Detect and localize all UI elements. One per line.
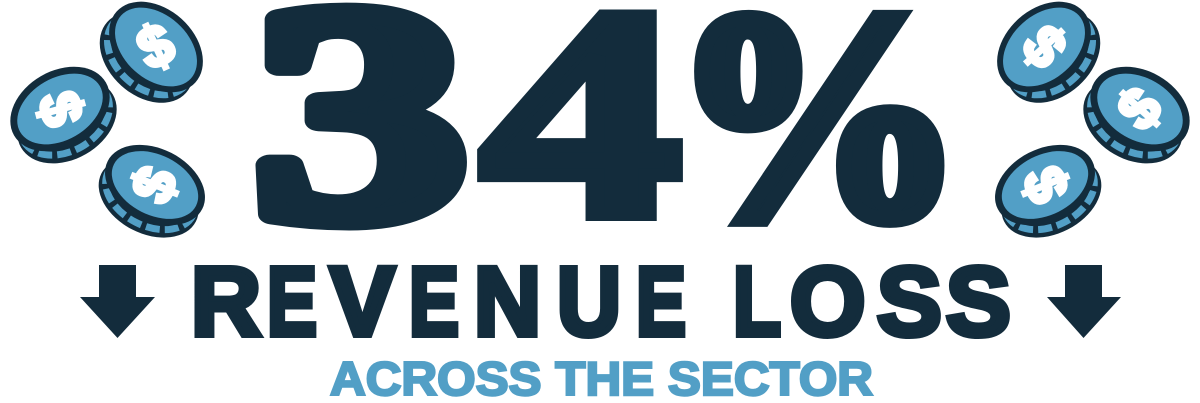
icon: right down arrow [1047, 265, 1121, 338]
icon: coin bottom left: $ [118, 158, 191, 212]
heading: revenue loss: E [409, 247, 459, 356]
heading: revenue loss: E [267, 247, 317, 356]
icon: coin bottom right [981, 129, 1115, 254]
icon: coin middle left: $ [25, 85, 96, 133]
icon: coin top left [82, 0, 221, 121]
icon: coin middle left [0, 50, 132, 181]
icon: coin top right [979, 0, 1118, 121]
icon: left down arrow [80, 265, 155, 338]
icon: coin middle right: $ [1105, 75, 1175, 142]
icon: coin top right: $ [1009, 13, 1079, 80]
heading: revenue loss: V [330, 247, 395, 356]
heading: revenue loss: E [636, 247, 686, 356]
heading: revenue loss: O [790, 247, 865, 356]
icon: coin middle right [1068, 50, 1200, 181]
icon: coin bottom right: $ [1009, 158, 1082, 212]
heading: revenue loss: S [946, 247, 1011, 356]
heading: revenue loss: L [733, 247, 781, 356]
heading: revenue loss: S [877, 247, 942, 356]
heading: revenue loss: R [191, 247, 261, 356]
icon: coin bottom left [85, 129, 219, 254]
icon: coin top left: $ [127, 10, 184, 83]
heading: revenue loss: N [474, 247, 541, 356]
heading: revenue loss: U [557, 247, 621, 356]
